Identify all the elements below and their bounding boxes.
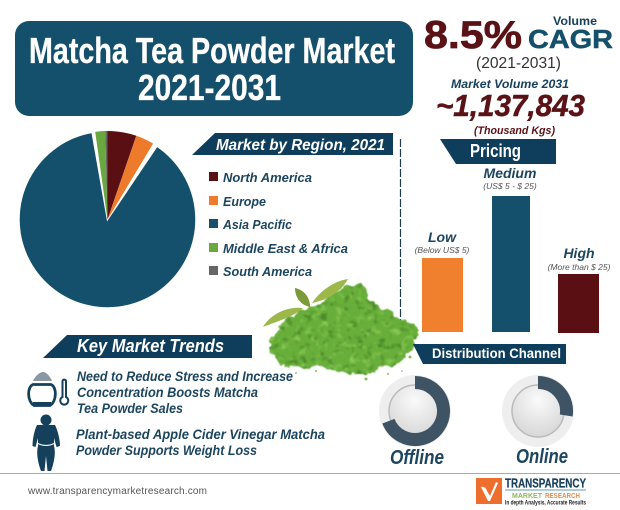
donut: offline: Offline	[390, 447, 444, 469]
image: matcha powder with leaves	[263, 279, 418, 380]
text: trend one: Need to Reduce Stress and Increase	[77, 369, 293, 384]
donut: offline	[379, 375, 451, 469]
website url: www.transparencymarketresearch.com	[27, 486, 207, 497]
heading: market by region	[192, 133, 393, 155]
logo: transparency market research: In depth Analysis, Accurate Results	[505, 500, 587, 506]
legend: regions: South America	[223, 264, 312, 279]
bar chart: pricing: High	[563, 245, 595, 261]
legend: regions: North America	[223, 170, 312, 185]
donut: online	[502, 375, 574, 468]
icon: matcha bowl and thermometer	[29, 372, 68, 406]
logo: transparency market research: MARKET	[512, 491, 542, 500]
bar chart: pricing: (US$ 5 - $ 25)	[483, 181, 537, 191]
heading: pricing	[440, 139, 556, 164]
title banner: 2021-2031	[138, 67, 281, 108]
text: trend one	[77, 369, 293, 416]
CAGR statistic: CAGR	[528, 24, 613, 54]
logo: transparency market research	[476, 476, 587, 506]
pie chart: market by region	[19, 131, 196, 308]
market volume statistic: ~1,137,843	[436, 88, 585, 123]
text: trend two: Powder Supports Weight Loss	[76, 443, 257, 458]
legend: regions: Europe	[223, 194, 266, 209]
title banner	[15, 21, 413, 116]
bar chart: pricing: (More than $ 25)	[548, 262, 611, 272]
bar chart: pricing: Medium	[484, 165, 536, 181]
bar chart: pricing	[415, 165, 611, 333]
text: trend two	[76, 427, 325, 458]
heading: key market trends: Key Market Trends	[77, 336, 224, 356]
market volume statistic: (Thousand Kgs)	[474, 125, 555, 137]
legend: regions: Asia Pacific	[222, 217, 293, 232]
heading: market by region: Market by Region, 2021	[216, 137, 385, 154]
market volume statistic: Market Volume 2031	[451, 77, 569, 91]
bar chart: pricing: (Below US$ 5)	[415, 245, 470, 255]
bar chart: pricing: Low	[428, 229, 457, 245]
CAGR statistic	[424, 14, 613, 72]
legend: regions: Middle East & Africa	[223, 241, 348, 256]
logo: transparency market research: RESEARCH	[545, 491, 580, 500]
heading: distribution channel	[413, 344, 566, 364]
logo: transparency market research: TRANSPARENCY	[505, 476, 586, 490]
CAGR statistic: 8.5%	[424, 14, 522, 57]
icon: person measuring waist	[32, 414, 60, 471]
heading: distribution channel: Distribution Channel	[432, 345, 561, 361]
text: trend one: Tea Powder Sales	[77, 401, 183, 416]
heading: pricing: Pricing	[470, 141, 521, 161]
text: trend one: Concentration Boosts Matcha	[77, 385, 258, 400]
heading: key market trends	[43, 335, 252, 358]
CAGR statistic: (2021-2031)	[476, 55, 561, 72]
title banner: Matcha Tea Powder Market	[29, 30, 395, 71]
text: trend two: Plant-based Apple Cider Vinegar Matcha	[76, 427, 325, 442]
CAGR statistic: Volume	[553, 14, 597, 28]
donut: online: Online	[516, 446, 568, 468]
market volume statistic	[436, 77, 585, 137]
legend: regions	[209, 170, 348, 279]
